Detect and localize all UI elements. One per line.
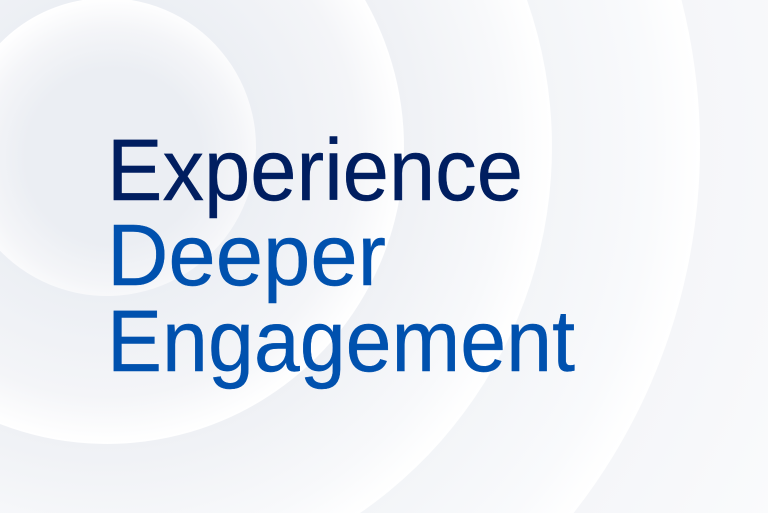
title — [107, 122, 575, 390]
title line: Deeper: Deeper — [107, 207, 386, 304]
title line: Experience: Experience — [107, 122, 523, 219]
title line: Engagement: Engagement — [107, 293, 575, 390]
